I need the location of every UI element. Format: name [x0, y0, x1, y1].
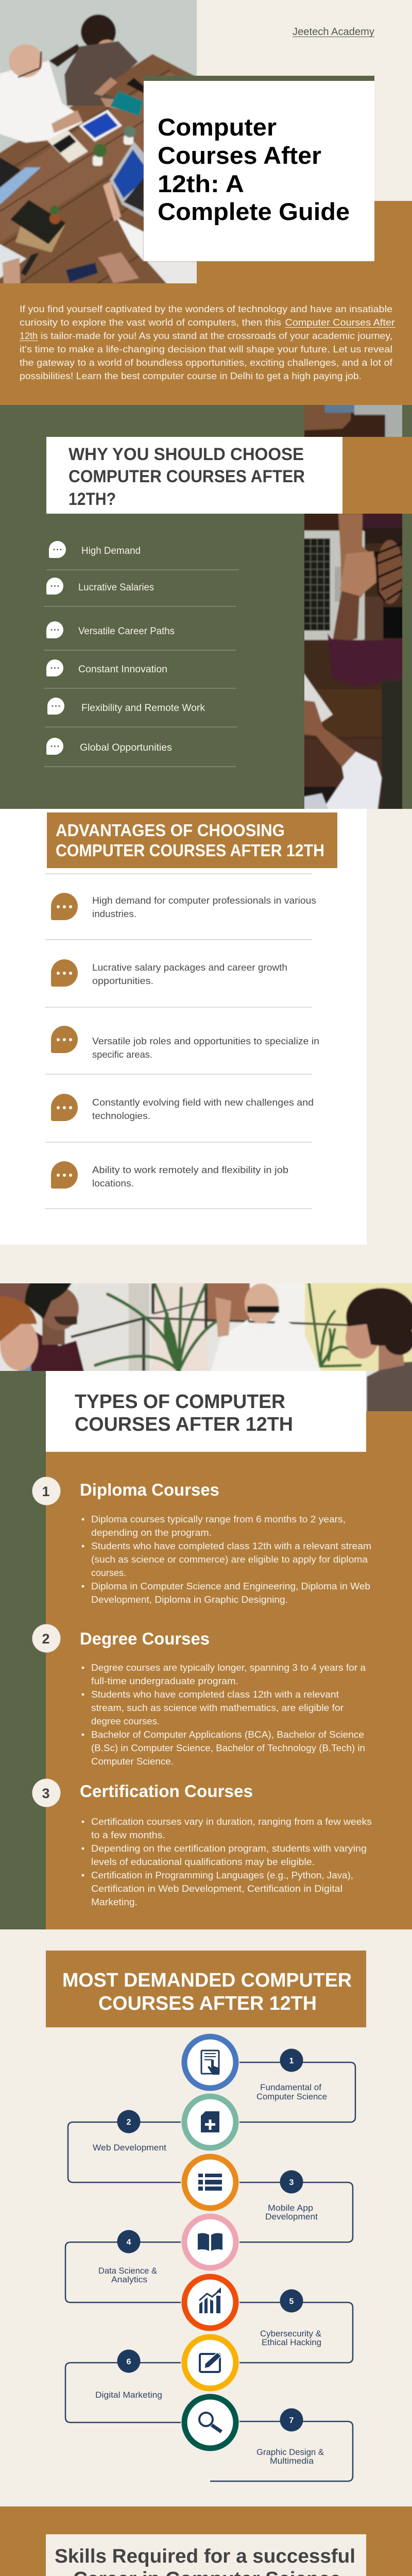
- list item: High Demand: High Demand: [81, 546, 141, 556]
- label 5: Cybersecurity & Ethical Hacking: [260, 2290, 322, 2347]
- step 6: pencil edit icon: [184, 2337, 236, 2388]
- intro paragraph: If you find yourself captivated by the wonders of technology and have an insatiable: [20, 304, 392, 314]
- heading: most demanded: COURSES AFTER 12TH: [98, 1993, 317, 2014]
- panel: types of computer courses: [0, 1371, 412, 1929]
- label 5: Cybersecurity & Ethical Hacking: Ethical Hacking: [262, 2337, 321, 2347]
- advantage 2: [51, 959, 287, 987]
- label 6: Digital Marketing: [95, 2349, 162, 2400]
- label 3: Mobile App Development: [265, 2170, 318, 2222]
- badge: 3: [32, 1778, 61, 1807]
- photo: team around wooden table: [0, 0, 197, 283]
- step 4: book icon: [184, 2216, 236, 2268]
- list item: Global Opportunities: Global Opportunities: [80, 742, 172, 753]
- block: certification courses: to a few months.: [91, 1830, 165, 1840]
- block: degree courses: (B.Sc) in Computer Science, Bachelor of Technology (B.Tech) in: [91, 1743, 365, 1753]
- label 2: Web Development: [93, 2110, 166, 2153]
- block: certification courses: Certification Courses: [80, 1782, 253, 1801]
- heading: why you should choose: COMPUTER COURSES AFTER: [68, 467, 305, 486]
- label 3: Mobile App Development: Mobile App: [268, 2203, 313, 2213]
- connector path: [65, 2062, 355, 2481]
- list item: Lucrative Salaries: Lucrative Salaries: [78, 582, 154, 593]
- step 7: magnifier icon: [184, 2397, 236, 2448]
- heading: types of computer courses: [46, 1371, 366, 1452]
- step 2: document plus icon: [184, 2096, 236, 2148]
- label 2: Web Development: 2: [127, 2118, 131, 2127]
- step 5: growth chart icon: [184, 2277, 236, 2328]
- label 4: Data Science & Analytics: Analytics: [111, 2275, 147, 2284]
- panel: skills: [0, 2506, 412, 2576]
- panel: hero: [0, 0, 412, 405]
- title card: [144, 76, 374, 261]
- label 1: Fundamental of Computer Science: Computer Science: [256, 2092, 327, 2102]
- block: degree courses: Computer Science.: [91, 1756, 174, 1767]
- heading: advantages: COMPUTER COURSES AFTER 12TH: [56, 841, 324, 860]
- block: degree courses: Degree courses are typically longer, spanning 3 to 4 years for a: [91, 1663, 366, 1673]
- label 3: Mobile App Development: 3: [289, 2178, 294, 2187]
- badge: 2: [32, 1624, 61, 1653]
- title card: Courses After: [158, 142, 321, 169]
- list item: Lucrative Salaries: [46, 578, 154, 595]
- heading: why you should choose: 12TH?: [68, 489, 116, 509]
- advantage 1: industries.: [92, 909, 136, 919]
- badge: 3: 3: [42, 1786, 50, 1801]
- intro paragraph: curiosity to explore the vast world of computers, then this: [20, 317, 281, 328]
- block: certification courses: [80, 1782, 372, 1907]
- list item: Flexibility and Remote Work: Flexibility and Remote Work: [81, 703, 205, 714]
- block: diploma courses: depending on the program.: [91, 1528, 212, 1538]
- heading: advantages: ADVANTAGES OF CHOOSING: [56, 821, 285, 840]
- block: degree courses: Bachelor of Computer Applications (BCA), Bachelor of Science: [91, 1730, 364, 1740]
- title card: Complete Guide: [158, 198, 350, 225]
- advantage 2: Lucrative salary packages and career growth: [92, 962, 287, 973]
- badge: 2: 2: [42, 1631, 50, 1647]
- block: diploma courses: (such as science or commerce) are eligible to apply for diploma: [91, 1554, 368, 1565]
- label 4: Data Science & Analytics: Data Science &: [98, 2266, 158, 2276]
- label 4: Data Science & Analytics: 4: [127, 2238, 131, 2247]
- panel: why choose: [0, 395, 412, 819]
- advantage 5: Ability to work remotely and flexibility in job: [92, 1165, 288, 1175]
- block: certification courses: Certification in Web Development, Certification in Digital: [91, 1884, 342, 1894]
- label 7: Graphic Design & Multimedia: Graphic Design &: [256, 2447, 324, 2457]
- badge: 1: [32, 1477, 61, 1505]
- block: certification courses: Certification in Programming Languages (e.g., Python, Java),: [91, 1870, 353, 1880]
- list item: Flexibility and Remote Work: [47, 698, 205, 715]
- heading: skills required: [46, 2534, 366, 2576]
- label 2: Web Development: Web Development: [93, 2143, 166, 2153]
- list item: High Demand: [49, 541, 141, 558]
- advantage 5: locations.: [92, 1178, 134, 1189]
- block: diploma courses: Diploma Courses: [80, 1480, 219, 1499]
- label 5: Cybersecurity & Ethical Hacking: 5: [289, 2297, 294, 2306]
- photo: group discussion banner: [0, 1283, 412, 1411]
- block: diploma courses: courses.: [91, 1568, 126, 1578]
- list item: Global Opportunities: [46, 738, 172, 755]
- label 6: Digital Marketing: 6: [127, 2358, 131, 2366]
- block: degree courses: full-time undergraduate program.: [91, 1676, 238, 1686]
- intro paragraph: 12th: [20, 331, 38, 341]
- label 7: Graphic Design & Multimedia: [256, 2408, 324, 2466]
- block: degree courses: Students who have completed class 12th with a relevant: [91, 1689, 339, 1700]
- intro paragraph: Computer Courses After: [285, 317, 395, 328]
- label 1: Fundamental of Computer Science: Fundamental of: [260, 2082, 321, 2092]
- list item: Versatile Career Paths: Versatile Career Paths: [78, 626, 175, 637]
- badge: 1: 1: [42, 1484, 50, 1499]
- block: diploma courses: Students who have completed class 12th with a relevant stream: [91, 1541, 371, 1551]
- step 3: list icon: [184, 2157, 236, 2208]
- advantage 4: technologies.: [92, 1111, 150, 1121]
- advantage 1: High demand for computer professionals in various: [92, 895, 316, 906]
- heading: most demanded: MOST DEMANDED COMPUTER: [62, 1970, 352, 1991]
- heading: advantages: [47, 812, 337, 868]
- label 7: Graphic Design & Multimedia: Multimedia: [270, 2456, 314, 2466]
- panel: advantages: [0, 809, 367, 1245]
- photo: clasped hands over laptop: [304, 405, 402, 809]
- advantage 3: Versatile job roles and opportunities to specialize in: [92, 1036, 319, 1046]
- block: degree courses: degree courses.: [91, 1716, 160, 1726]
- block: certification courses: Certification courses vary in duration, ranging from a few weeks: [91, 1817, 372, 1827]
- heading: types of computer courses: TYPES OF COMPUTER: [75, 1391, 285, 1413]
- advantage 4: [51, 1094, 314, 1121]
- link: Jeetech Academy: Jeetech Academy: [293, 26, 374, 38]
- block: diploma courses: Diploma courses typically range from 6 months to 2 years,: [91, 1514, 346, 1524]
- list item: Versatile Career Paths: [46, 621, 175, 638]
- block: degree courses: Degree Courses: [80, 1629, 210, 1648]
- block: degree courses: [80, 1629, 366, 1767]
- label 5: Cybersecurity & Ethical Hacking: Cybersecurity &: [260, 2329, 322, 2338]
- advantage 3: [51, 1026, 319, 1060]
- block: diploma courses: [80, 1480, 371, 1605]
- intro paragraph: is tailor-made for you! As you stand at the crossroads of your academic journey,: [41, 331, 392, 341]
- block: diploma courses: Development, Diploma in Graphic Designing.: [91, 1595, 288, 1605]
- list item: Constant Innovation: Constant Innovation: [78, 664, 167, 675]
- intro paragraph: possibilities! Learn the best computer course in Delhi to get a high paying job.: [20, 371, 362, 381]
- heading: most demanded: [46, 1951, 366, 2027]
- panel: most demanded courses: [0, 1929, 412, 2506]
- block: certification courses: Depending on the certification program, students with varying: [91, 1843, 367, 1854]
- heading: skills required: Skills Required for a successful: [55, 2546, 355, 2567]
- label 7: Graphic Design & Multimedia: 7: [289, 2416, 294, 2425]
- heading: types of computer courses: COURSES AFTER 12TH: [75, 1414, 293, 1435]
- title card: Computer: [158, 113, 277, 141]
- label 6: Digital Marketing: Digital Marketing: [95, 2390, 162, 2400]
- label 4: Data Science & Analytics: [98, 2230, 158, 2284]
- advantage 3: specific areas.: [92, 1049, 152, 1060]
- block: diploma courses: Diploma in Computer Science and Engineering, Diploma in Web: [91, 1581, 370, 1591]
- block: certification courses: levels of educational qualifications may be eligible.: [91, 1857, 315, 1867]
- block: degree courses: stream, such as science with mathematics, are eligible for: [91, 1703, 344, 1713]
- label 1: Fundamental of Computer Science: 1: [289, 2057, 294, 2065]
- step 1: tablet icon: [184, 2037, 236, 2088]
- block: certification courses: Marketing.: [91, 1897, 138, 1907]
- advantage 1: [51, 893, 316, 920]
- intro paragraph: it's time to make a life-changing decision that will shape your future. Let us reveal: [20, 344, 392, 354]
- label 3: Mobile App Development: Development: [265, 2212, 318, 2222]
- intro paragraph: [20, 304, 396, 381]
- advantage 2: opportunities.: [92, 976, 153, 986]
- heading: why you should choose: WHY YOU SHOULD CHOOSE: [68, 445, 304, 464]
- label 1: Fundamental of Computer Science: [256, 2048, 327, 2102]
- advantage 4: Constantly evolving field with new challenges and: [92, 1097, 314, 1108]
- list item: Constant Innovation: [46, 659, 167, 676]
- advantage 5: [51, 1161, 288, 1189]
- intro paragraph: the gateway to a world of boundless opportunities, exciting challenges, and a lot of: [20, 358, 393, 368]
- heading: why you should choose: [46, 437, 412, 514]
- title card: 12th: A: [158, 170, 244, 197]
